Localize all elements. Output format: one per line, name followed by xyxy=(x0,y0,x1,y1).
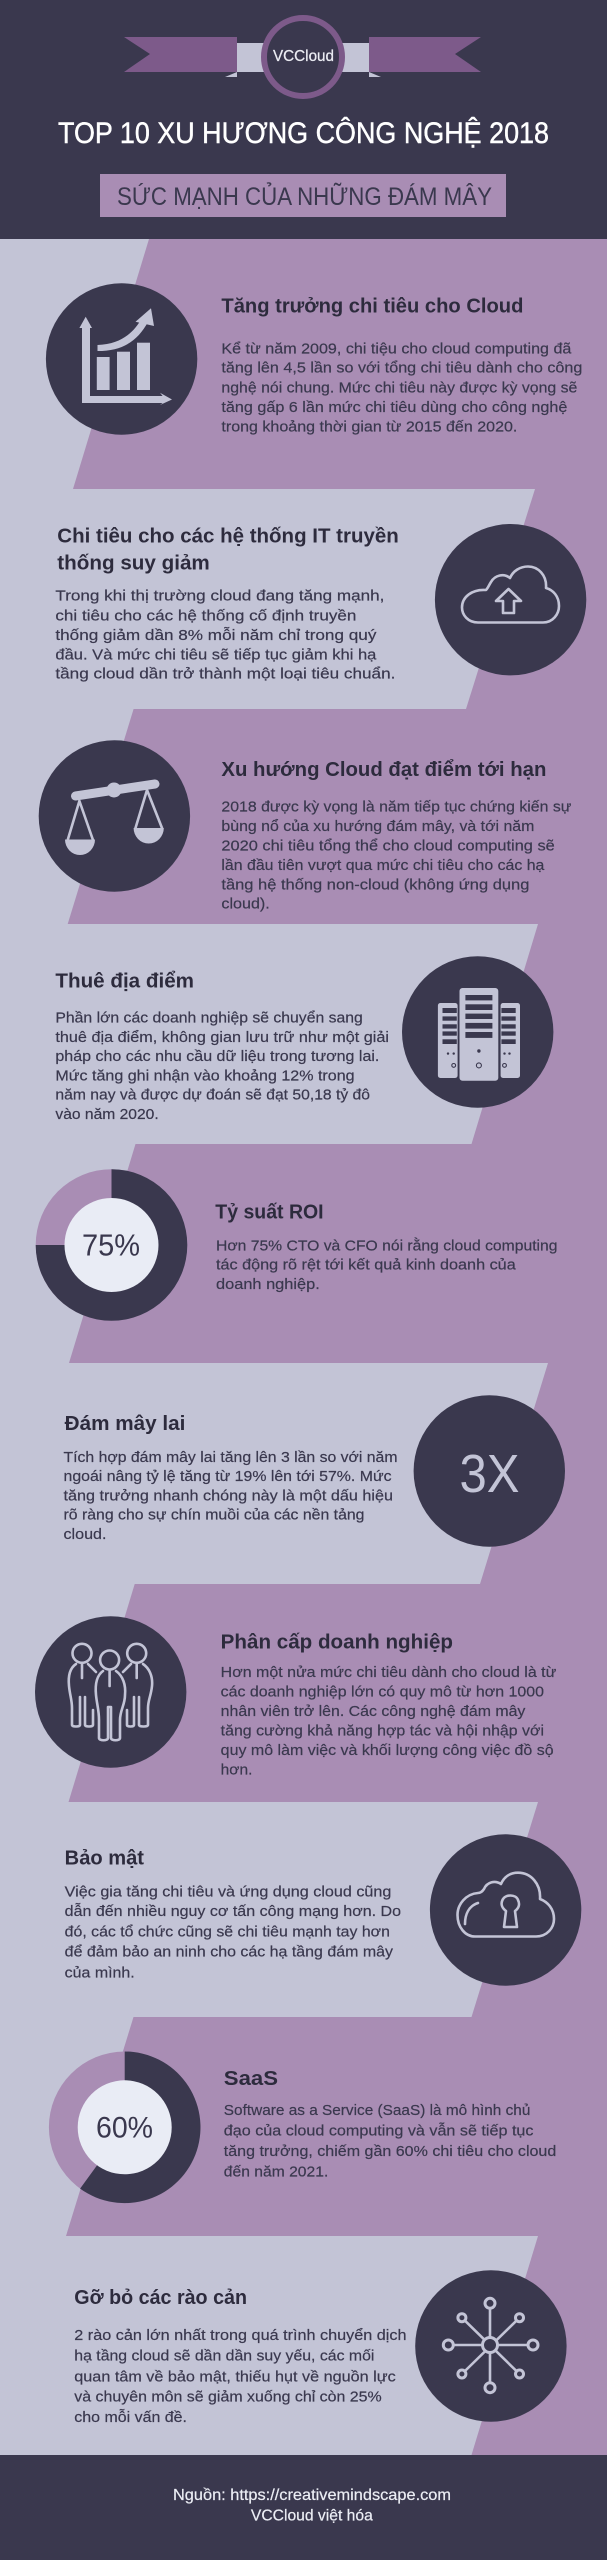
heading: thống suy giảm xyxy=(57,552,210,574)
heading: Thuê địa điểm xyxy=(55,970,194,992)
body text xyxy=(74,2327,407,2426)
body text xyxy=(216,1237,558,1293)
heading: SaaS xyxy=(224,2068,278,2090)
footer: VCCloud việt hóa xyxy=(251,2507,373,2524)
body text: tầng hệ thống non-cloud (không ứng dụng xyxy=(221,876,529,893)
subtitle banner: SỨC MẠNH CỦA NHỮNG ĐÁM MÂY xyxy=(117,181,492,211)
body text: quan tâm về bảo mật, thiếu hụt về nguồn lực xyxy=(74,2368,396,2385)
icon: people xyxy=(35,1616,186,1768)
ribbon logo xyxy=(124,18,481,96)
heading: Chi tiêu cho các hệ thống IT truyền xyxy=(57,526,399,548)
body text: tầng cloud dần trở thành một loại tiêu chuẩn. xyxy=(55,666,395,683)
body text: cloud). xyxy=(221,896,270,913)
footer: Nguồn: https://creativemindscape.com xyxy=(173,2487,451,2504)
body text: ngoái nâng tỷ lệ tăng từ 19% lên tới 57%. Mức xyxy=(64,1468,392,1485)
body text: pháp cho các nhu cầu dữ liệu trong tương lai. xyxy=(55,1048,379,1065)
body text: nghệ nói chung. Mức chi tiêu này được kỳ vọng sẽ xyxy=(221,379,577,396)
body text: tăng trưởng nhanh chóng này là một dấu hiệu xyxy=(64,1487,393,1504)
body text: tăng lên 4,5 lần so với tổng chi tiêu dành cho công xyxy=(221,360,582,377)
icon: 3X xyxy=(414,1395,565,1547)
panel: ROI xyxy=(0,1144,607,1363)
panel: legacy IT decline xyxy=(0,489,607,709)
body text: quy mô làm việc và khối lượng công việc đồ sộ xyxy=(221,1742,554,1759)
body text: chi tiêu cho các hệ thống cố định truyền xyxy=(55,607,356,624)
body text: bùng nổ của xu hướng đám mây, và tới năm xyxy=(221,818,534,835)
title: TOP 10 XU HƯƠNG CÔNG NGHỆ 2018 xyxy=(58,116,549,150)
panel: cloud spending growth xyxy=(0,239,607,489)
body text: đó, các tổ chức cũng sẽ chi tiêu mạnh tay hơn xyxy=(65,1923,390,1940)
donut chart: 60% xyxy=(49,2052,200,2203)
body text: thuê địa điểm, không gian lưu trữ như một giải xyxy=(55,1029,389,1046)
body text: vào năm 2020. xyxy=(55,1106,159,1123)
body text: các doanh nghiệp lớn có quy mô từ hơn 1000 xyxy=(221,1684,544,1701)
body text: năm nay và được dự đoán sẽ đạt 50,18 tỷ đô xyxy=(55,1087,370,1104)
body text xyxy=(221,1664,556,1778)
body text: đến năm 2021. xyxy=(224,2163,328,2180)
body text xyxy=(64,1449,398,1543)
subtitle banner xyxy=(100,174,506,217)
body text: 2018 được kỳ vọng là năm tiếp tục chứng kiến sự xyxy=(221,799,571,816)
header xyxy=(0,0,607,239)
body text: Tích hợp đám mây lai tăng lên 3 lần so với năm xyxy=(64,1449,398,1466)
heading xyxy=(57,526,399,574)
body text: thống giảm dần 8% mỗi năm chỉ trong quý xyxy=(55,627,377,644)
body text: tăng trưởng, chiếm gần 60% chi tiêu cho cloud xyxy=(224,2143,556,2160)
body text: hơn. xyxy=(221,1761,252,1778)
heading: Bảo mật xyxy=(65,1847,144,1869)
body text xyxy=(55,1010,389,1123)
body text: và chuyên môn sẽ giảm xuống chỉ còn 25% xyxy=(74,2389,382,2406)
body text: để đảm bảo an ninh cho các hạ tầng đám mây xyxy=(65,1944,394,1961)
heading: Gỡ bỏ các rào cản xyxy=(74,2287,247,2309)
body text: của mình. xyxy=(65,1964,135,1981)
heading: Đám mây lai xyxy=(65,1413,185,1435)
body text: Trong khi thị trường cloud đang tăng mạnh, xyxy=(55,588,384,605)
icon: servers xyxy=(402,956,553,1108)
body text: cloud. xyxy=(64,1526,106,1543)
body text: doanh nghiệp. xyxy=(216,1276,320,1293)
panel: enterprise tier xyxy=(0,1584,607,1802)
body text xyxy=(221,799,571,913)
donut chart: 75% xyxy=(36,1169,187,1321)
icon: cloud keyhole xyxy=(430,1834,581,1986)
panel: cloud tipping point xyxy=(0,709,607,924)
body text: Mức tăng ghi nhận vào khoảng 12% trong xyxy=(55,1067,355,1084)
panel: colocation xyxy=(0,924,607,1144)
body text: trong khoảng thời gian từ 2015 đến 2020. xyxy=(221,418,517,435)
body text: hạ tầng cloud sẽ dần dần suy yếu, các mối xyxy=(74,2348,374,2365)
heading: Phân cấp doanh nghiệp xyxy=(221,1631,453,1653)
panel: SaaS xyxy=(0,2017,607,2236)
icon: 3X: 3X xyxy=(460,1444,520,1504)
body text: nhân viên trở lên. Các công nghệ đám mây xyxy=(221,1703,526,1720)
body text: Phần lớn các doanh nghiệp sẽ chuyển sang xyxy=(55,1010,363,1026)
body text xyxy=(221,340,582,435)
body text: Hơn một nửa mức chi tiêu dành cho cloud là từ xyxy=(221,1664,556,1681)
body text: đạo của cloud computing và vẫn sẽ tiếp tục xyxy=(224,2123,534,2140)
body text: tăng cường khả năng hợp tác và hội nhập với xyxy=(221,1723,544,1740)
body text: lần đầu tiên vượt qua mức chi tiêu cho các hạ xyxy=(221,857,545,874)
donut chart: 75%: 75% xyxy=(82,1228,140,1263)
body text xyxy=(224,2102,556,2180)
donut chart: 60%: 60% xyxy=(96,2112,153,2145)
body text: Hơn 75% CTO và CFO nói rằng cloud computing xyxy=(216,1237,558,1254)
body text: Kể từ năm 2009, chi tiệu cho cloud computing đã xyxy=(221,340,572,357)
icon: growth chart xyxy=(46,283,197,435)
body text: Việc gia tăng chi tiêu và ứng dụng cloud cũng xyxy=(65,1884,391,1901)
heading: Xu hướng Cloud đạt điểm tới hạn xyxy=(221,759,546,781)
heading: Tỷ suất ROI xyxy=(215,1202,324,1224)
panel: removing barriers xyxy=(0,2236,607,2455)
body text: tác động rõ rệt tới kết quả kinh doanh của xyxy=(216,1257,516,1274)
ribbon logo: VCCloud xyxy=(273,48,334,65)
body text: tăng gấp 6 lần mức chi tiêu dùng cho công nghệ xyxy=(221,399,567,416)
body text: dẫn đến nhiều nguy cơ tấn công mạng hơn. Do xyxy=(65,1903,401,1920)
heading: Tăng trưởng chi tiêu cho Cloud xyxy=(221,296,523,318)
body text: rõ ràng cho sự chín muồi của các nền tảng xyxy=(64,1507,365,1524)
body text xyxy=(65,1884,401,1981)
body text: đầu. Và mức chi tiêu sẽ tiếp tục giảm khi hạ xyxy=(55,646,377,663)
panel: hybrid cloud xyxy=(0,1363,607,1584)
body text: 2 rào cản lớn nhất trong quá trình chuyển dịch xyxy=(74,2327,407,2344)
body text: cho mỗi vấn đề. xyxy=(74,2409,187,2426)
icon: network hub xyxy=(415,2270,567,2422)
body text: Software as a Service (SaaS) là mô hình chủ xyxy=(224,2102,530,2119)
panel: security xyxy=(0,1802,607,2017)
footer xyxy=(0,2455,607,2560)
icon: cloud upload xyxy=(435,524,586,675)
icon: balance scale xyxy=(39,740,190,892)
body text: 2020 chi tiêu tổng thể cho cloud computing sẽ xyxy=(221,837,555,854)
body text xyxy=(55,588,395,683)
